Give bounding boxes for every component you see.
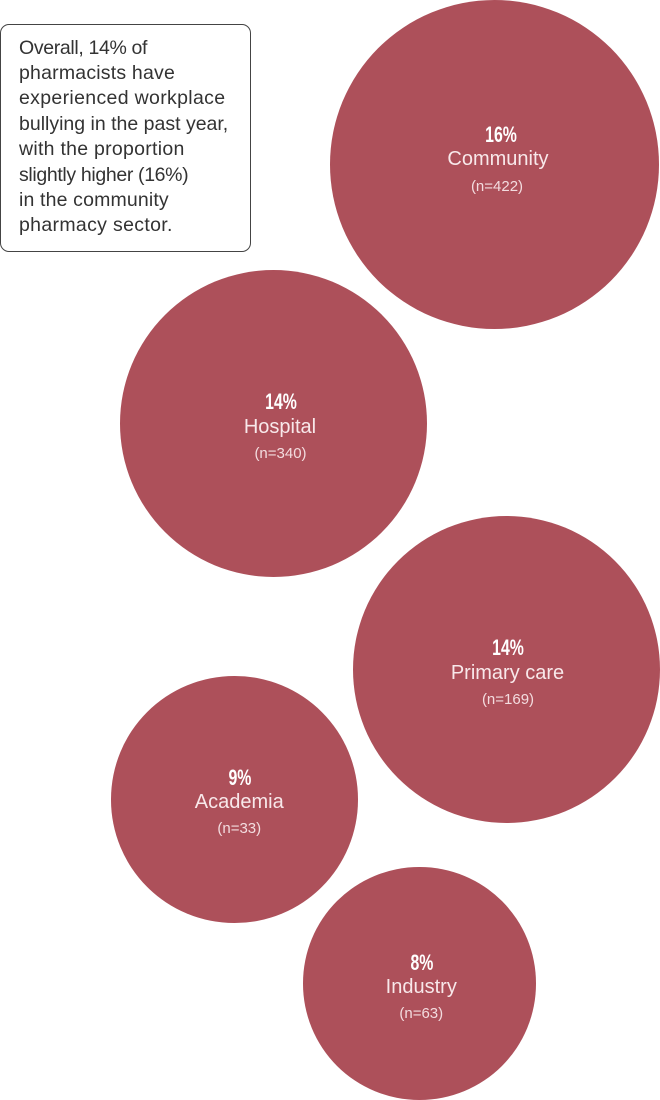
- callout: overall summary: pharmacists have: [19, 62, 175, 84]
- callout: overall summary: [0, 24, 250, 252]
- circle: Primary care: 14%: [492, 635, 524, 660]
- circle: Hospital: (n=340): [254, 445, 307, 462]
- circle: Primary care: Primary care: [451, 662, 564, 684]
- circle: Academia: Academia: [195, 791, 284, 813]
- circle: Academia: [111, 676, 358, 922]
- circle: Industry: [303, 867, 536, 1100]
- circle: Industry: 8%: [410, 950, 433, 975]
- circle: Primary care: (n=169): [482, 691, 534, 708]
- callout: overall summary: experienced workplace: [19, 87, 225, 109]
- circle: Hospital: 14%: [265, 389, 297, 414]
- callout: overall summary: Overall, 14% of: [19, 36, 147, 58]
- circle: Industry: (n=63): [399, 1005, 443, 1022]
- circle: Community: Community: [447, 148, 549, 170]
- circle: Community: [330, 0, 659, 329]
- callout: overall summary: bullying in the past year,: [19, 113, 228, 135]
- circle: Academia: (n=33): [217, 820, 261, 837]
- callout: overall summary: with the proportion: [19, 138, 185, 160]
- circle: Academia: 9%: [228, 765, 251, 790]
- circle: Community: 16%: [486, 122, 517, 147]
- circle: Hospital: [120, 270, 427, 577]
- circle: Industry: Industry: [386, 976, 457, 998]
- circle: Community: (n=422): [471, 178, 523, 194]
- callout: overall summary: in the community: [19, 189, 169, 211]
- callout: overall summary: pharmacy sector.: [19, 214, 173, 236]
- circle: Primary care: [353, 516, 660, 823]
- callout: overall summary: slightly higher (16%): [19, 164, 188, 186]
- circle: Hospital: Hospital: [244, 416, 316, 438]
